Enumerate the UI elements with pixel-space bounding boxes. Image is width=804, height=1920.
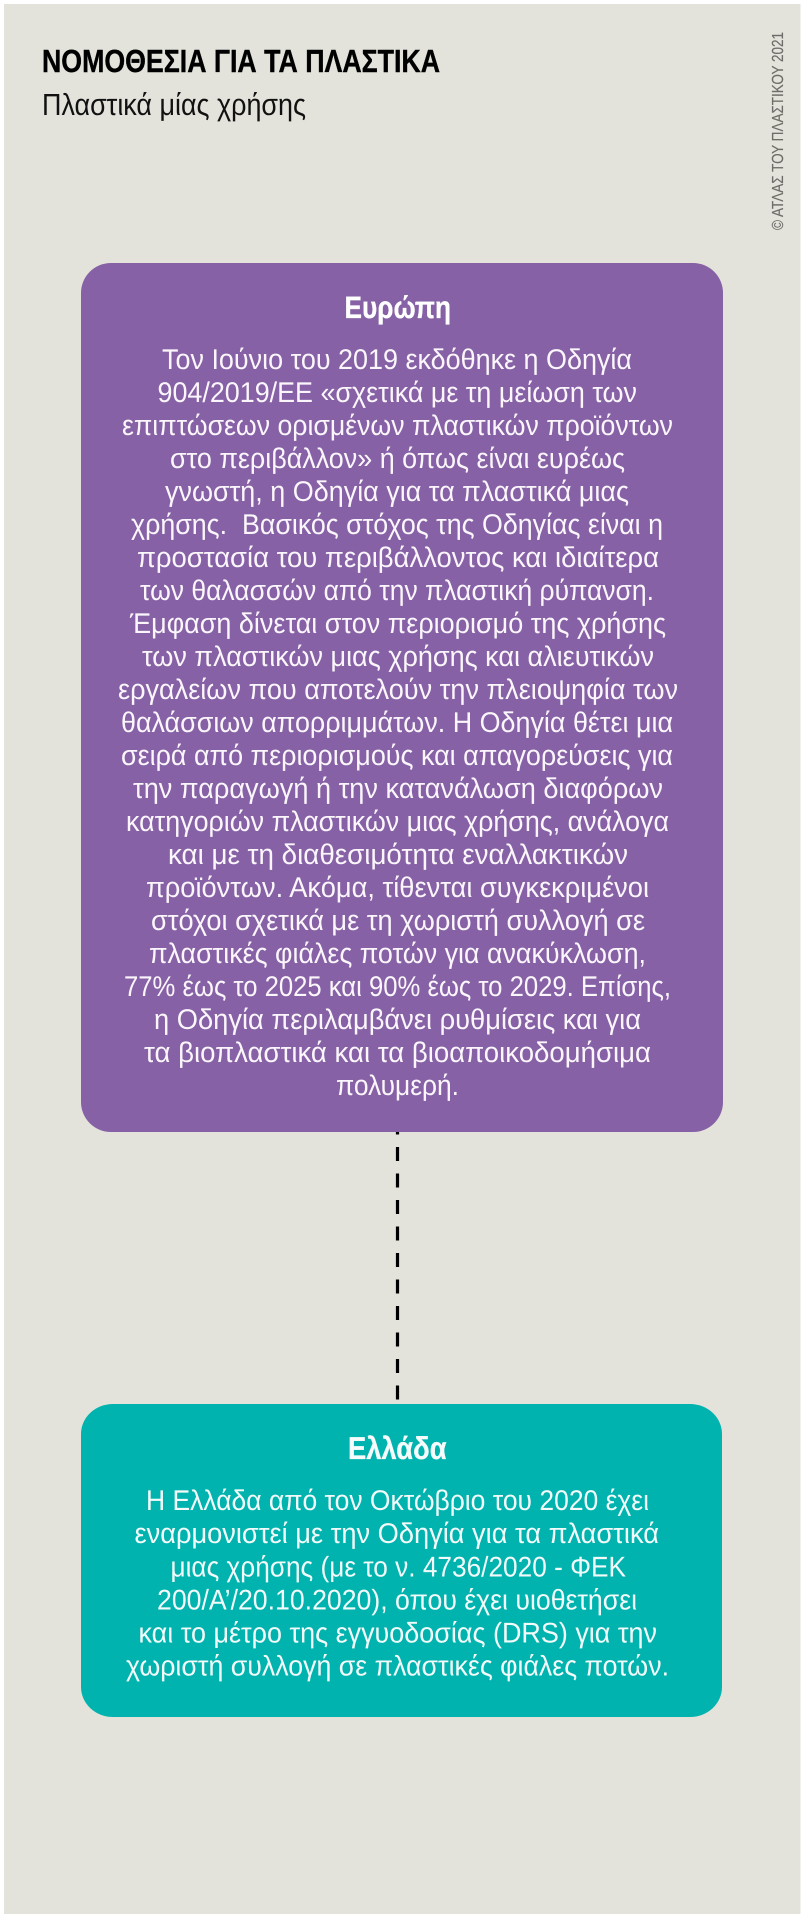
text block: Europe: των πλαστικών μιας χρήσης και αλιευτικών: [142, 641, 654, 673]
heading: Greece: Ελλάδα: [348, 1430, 447, 1466]
text block: Greece: [126, 1485, 669, 1682]
text block: Europe: Έμφαση δίνεται στον περιορισμό της χρήσης: [129, 608, 666, 640]
text block: Greece: 200/Α’/20.10.2020), όπου έχει υιοθετήσει: [157, 1584, 637, 1616]
text block: Europe: και με τη διαθεσιμότητα εναλλακτικών: [168, 839, 628, 871]
panel: Greece: [81, 1404, 722, 1717]
text block: Europe: γνωστή, η Οδηγία για τα πλαστικά μιας: [165, 476, 629, 508]
text block: Europe: την παραγωγή ή την κατανάλωση διαφόρων: [133, 773, 663, 805]
text block: Europe: επιπτώσεων ορισμένων πλαστικών προϊόντων: [122, 410, 673, 442]
heading: Europe: Ευρώπη: [344, 290, 451, 325]
text block: Europe: 904/2019/ΕΕ «σχετικά με τη μείωση των: [158, 377, 637, 409]
text block: Greece: εναρμονιστεί με την Οδηγία για τα πλαστικά: [134, 1518, 659, 1550]
panel background: Greece: [81, 1404, 722, 1717]
text block: Europe: η Οδηγία περιλαμβάνει ρυθμίσεις και για: [154, 1004, 641, 1036]
text block: Greece: χωριστή συλλογή σε πλαστικές φιάλες ποτών.: [126, 1650, 669, 1682]
text block: Greece: μιας χρήσης (με το ν. 4736/2020 - ΦΕΚ: [170, 1552, 626, 1584]
panel background: Europe: [81, 263, 723, 1132]
dashed connector: [396, 1132, 399, 1404]
copyright note: © ΑΤΛΑΣ ΤΟΥ ΠΛΑΣΤΙΚΟΥ 2021: [770, 32, 787, 230]
text block: Europe: Τον Ιούνιο του 2019 εκδόθηκε η Οδηγία: [162, 344, 632, 376]
panel: Europe: [81, 263, 723, 1132]
text block: Europe: πολυμερή.: [336, 1070, 459, 1102]
text block: Europe: χρήσης. Βασικός στόχος της Οδηγίας είναι η: [131, 509, 663, 541]
text block: Europe: σειρά από περιορισμούς και απαγορεύσεις για: [121, 740, 673, 772]
text block: Europe: προστασία του περιβάλλοντος και ιδιαίτερα: [137, 542, 659, 574]
text block: Europe: τα βιοπλαστικά και τα βιοαποικοδομήσιμα: [144, 1037, 651, 1069]
text block: Europe: 77% έως το 2025 και 90% έως το 2029. Επίσης,: [124, 971, 671, 1003]
text block: Greece: Η Ελλάδα από τον Οκτώβριο του 2020 έχει: [146, 1485, 649, 1517]
text block: Greece: και το μέτρο της εγγυοδοσίας (DRS) για την: [138, 1618, 657, 1650]
text block: Europe: των θαλασσών από την πλαστική ρύπανση.: [140, 575, 654, 607]
text block: Europe: θαλάσσιων απορριμμάτων. Η Οδηγία θέτει μια: [121, 707, 673, 739]
text block: Europe: πλαστικές φιάλες ποτών για ανακύκλωση,: [149, 938, 646, 970]
text block: Europe: εργαλείων που αποτελούν την πλειοψηφία των: [118, 674, 678, 706]
text block: Europe: στόχοι σχετικά με τη χωριστή συλλογή σε: [151, 905, 645, 937]
title: ΝΟΜΟΘΕΣΙΑ ΓΙΑ ΤΑ ΠΛΑΣΤΙΚΑ: [42, 43, 440, 79]
text block: Europe: [118, 344, 678, 1102]
text block: Europe: προϊόντων. Ακόμα, τίθενται συγκεκριμένοι: [146, 872, 649, 904]
subtitle: Πλαστικά μίας χρήσης: [42, 88, 306, 122]
text block: Europe: στο περιβάλλον» ή όπως είναι ευρέως: [170, 443, 625, 475]
text block: Europe: κατηγοριών πλαστικών μιας χρήσης, ανάλογα: [126, 806, 669, 838]
